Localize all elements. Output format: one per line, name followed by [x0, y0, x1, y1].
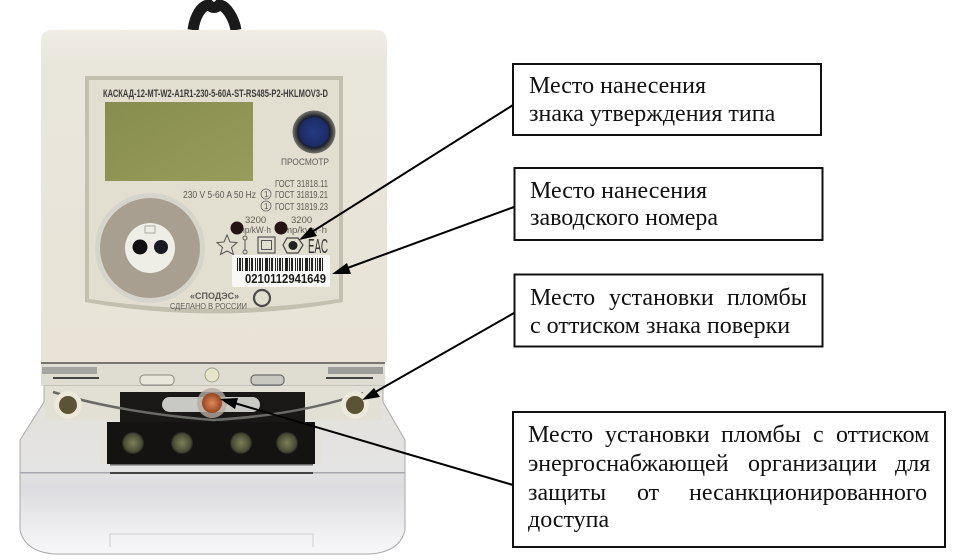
specifications: ГОСТ 31819.23 [275, 202, 328, 213]
dial [95, 193, 205, 303]
meter photo [20, 30, 405, 554]
callout: supplier seal: энергоснабжающей [528, 451, 729, 477]
specifications: ГОСТ 31818.11 [275, 179, 328, 190]
callout: supplier seal: установки [605, 422, 710, 448]
callout: supplier seal: оттиском [836, 422, 929, 448]
callout: supplier seal: пломбы [721, 422, 801, 448]
icon: hanging hook [193, 5, 236, 30]
certification marks [217, 235, 328, 258]
callout: type approval mark: Место нанесения [529, 73, 706, 99]
arrow: serial number [332, 207, 514, 274]
LED indicators: mp/kW·h [238, 225, 271, 236]
arrow: supplier seal [220, 398, 513, 485]
callout: verification seal: пломбы [727, 285, 807, 311]
specifications: ГОСТ 31819.21 [275, 190, 328, 201]
callout: supplier seal: с [813, 422, 824, 448]
arrow: type approval mark [299, 105, 513, 240]
cover [20, 386, 405, 554]
arrow: verification seal [362, 313, 514, 400]
callout: serial number: заводского номера [530, 205, 718, 231]
callout: supplier seal: от [637, 480, 660, 506]
front panel: ЕАС [308, 236, 328, 258]
specifications: 230 V 5-60 A 50 Hz [183, 190, 256, 201]
manufacturer: «СПОДЭС» [190, 291, 239, 301]
LED indicators: 3200 [245, 215, 266, 226]
view button [281, 110, 336, 167]
callout: supplier seal: защиты [528, 480, 606, 506]
specifications: 1 [264, 202, 269, 211]
LED indicators [230, 215, 327, 236]
callout: supplier seal: организации [748, 451, 877, 477]
cover seam and grip [20, 472, 405, 547]
LCD screen [105, 102, 253, 181]
callout: serial number: Место нанесения [530, 178, 707, 204]
callout: supplier seal: Место [528, 422, 593, 448]
front panel [85, 76, 343, 314]
callout: type approval mark: знака утверждения типа [529, 101, 776, 127]
callout: supplier seal: доступа [528, 507, 609, 533]
callout: verification seal: с оттиском знака поверки [530, 313, 790, 339]
manufacturer: СДЕЛАНО В РОССИИ [170, 301, 247, 311]
specifications [183, 179, 328, 213]
copper seal screw [202, 393, 222, 413]
specifications: 1 [264, 190, 269, 199]
model label: КАСКАД-12-MT-W2-A1R1-230-5-60A-ST-RS485-P2-HKLMOV3-D [103, 88, 328, 100]
callout: supplier seal [513, 412, 945, 547]
callout: verification seal: Место [530, 285, 595, 311]
transparent strip [41, 362, 385, 386]
callout: verification seal: установки [609, 285, 714, 311]
manufacturer [170, 290, 270, 311]
LED indicators: 3200 [291, 215, 312, 226]
callout: supplier seal: для [895, 451, 930, 477]
LED indicators: mp/kvar·h [284, 225, 327, 236]
callout: serial number [514, 168, 822, 240]
callout: verification seal [514, 274, 822, 346]
view button: ПРОСМОТР [281, 157, 329, 167]
callout: supplier seal: несанкционированного [689, 480, 927, 506]
serial barcode sticker [232, 255, 330, 287]
side seal screws [54, 391, 369, 419]
callout: type approval mark [513, 64, 821, 135]
screw terminal block [53, 388, 363, 466]
meter body [41, 30, 387, 362]
serial barcode sticker: 0210112941649 [245, 271, 326, 286]
